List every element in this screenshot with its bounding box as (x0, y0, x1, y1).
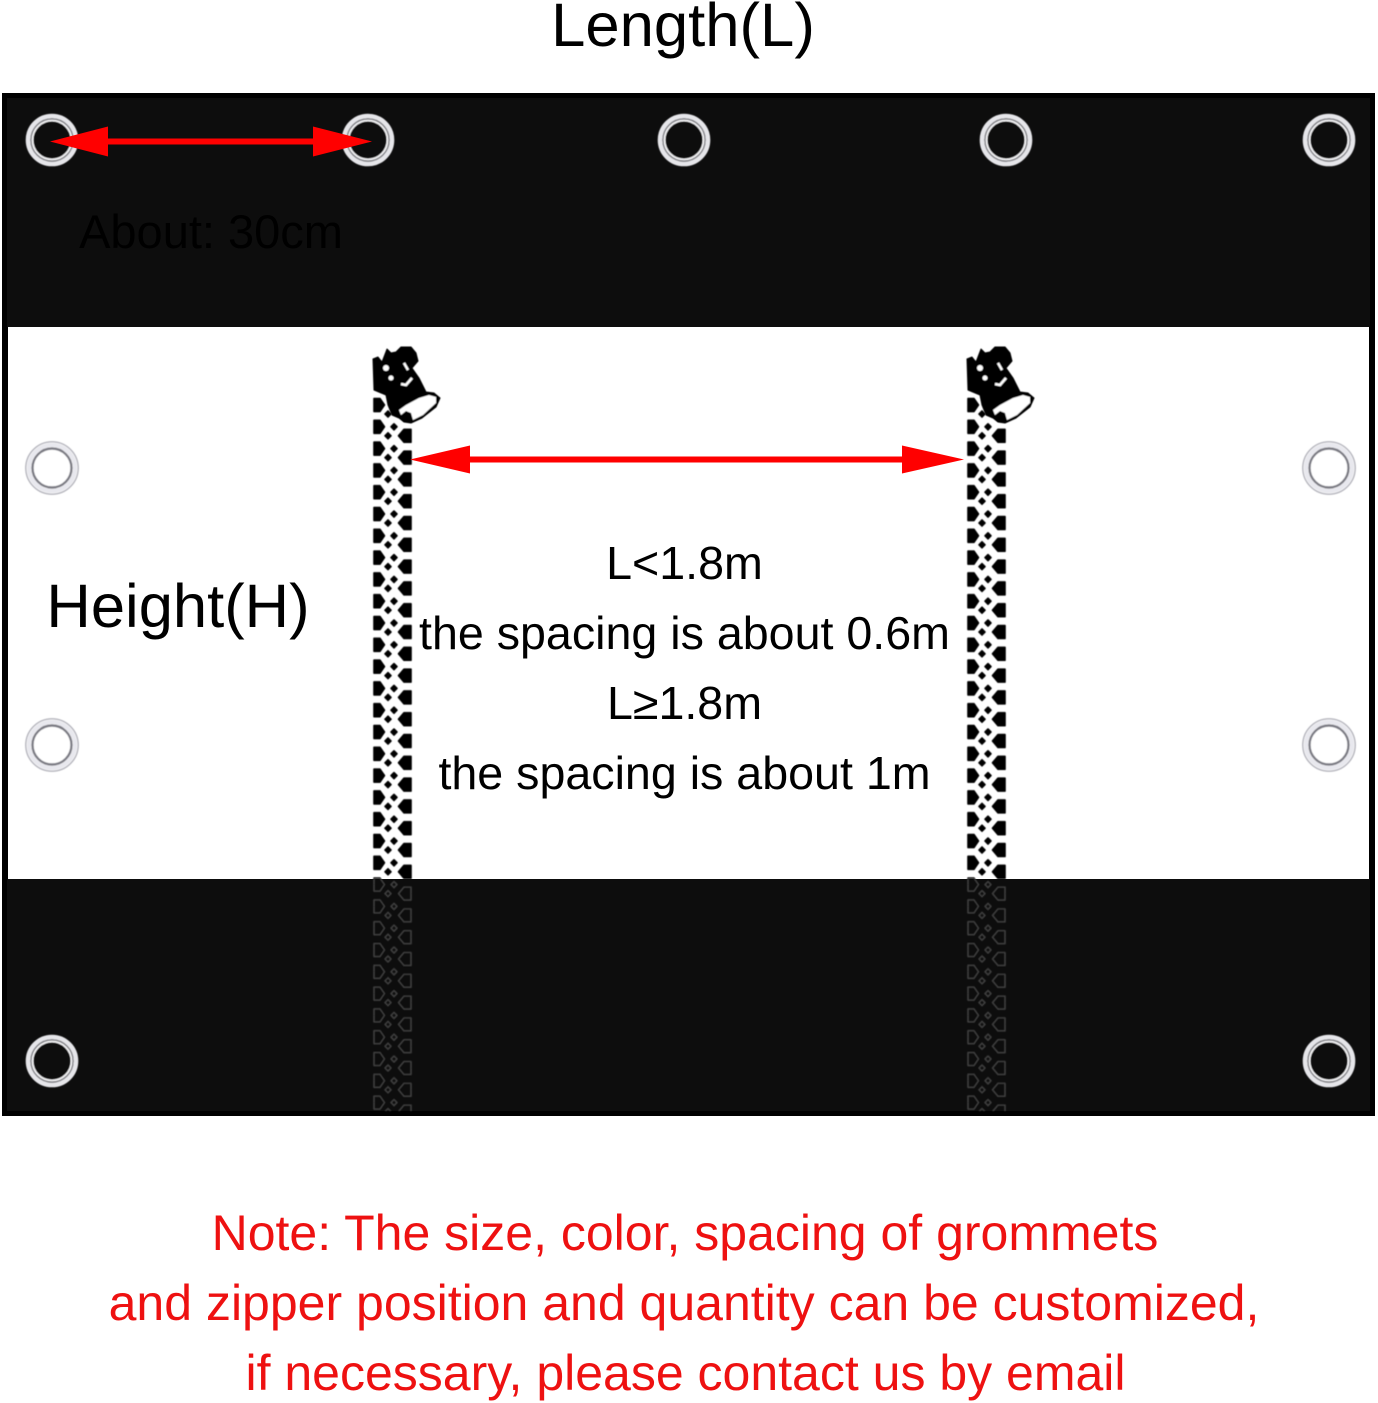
grommets: bottom row (28, 1037, 1353, 1085)
panel: bottom black band (7, 879, 1370, 1111)
icon: right zipper pull (967, 347, 1034, 423)
text block: zipper spacing rules: the spacing is about 1m (438, 747, 931, 799)
panel: white centre (8, 327, 1369, 879)
label: Height(H): Height(H) (46, 572, 310, 641)
text block: zipper spacing rules: L≥1.8m (607, 677, 762, 729)
text block: zipper spacing rules: L<1.8m (606, 537, 763, 589)
grommets: left and right sides (26, 442, 1355, 771)
panel: top black band (7, 98, 1370, 327)
zipper: right (966, 347, 1034, 1111)
grommets: top row (28, 116, 1353, 164)
icon: left zipper pull (373, 347, 440, 423)
text block: zipper spacing rules (419, 537, 950, 799)
arrow: zipper spacing (410, 446, 964, 474)
panel: tarp outline (2, 93, 1375, 1116)
note: customization (109, 1205, 1259, 1401)
zipper: left (372, 347, 440, 1111)
arrow: grommet spacing (50, 126, 372, 156)
note: customization: if necessary, please contact us by email (245, 1345, 1126, 1401)
note: customization: Note: The size, color, spacing of grommets (212, 1205, 1158, 1261)
note: customization: and zipper position and quantity can be customized, (109, 1275, 1259, 1331)
text block: zipper spacing rules: the spacing is about 0.6m (419, 607, 950, 659)
label: About 30cm: About: 30cm (79, 205, 343, 258)
